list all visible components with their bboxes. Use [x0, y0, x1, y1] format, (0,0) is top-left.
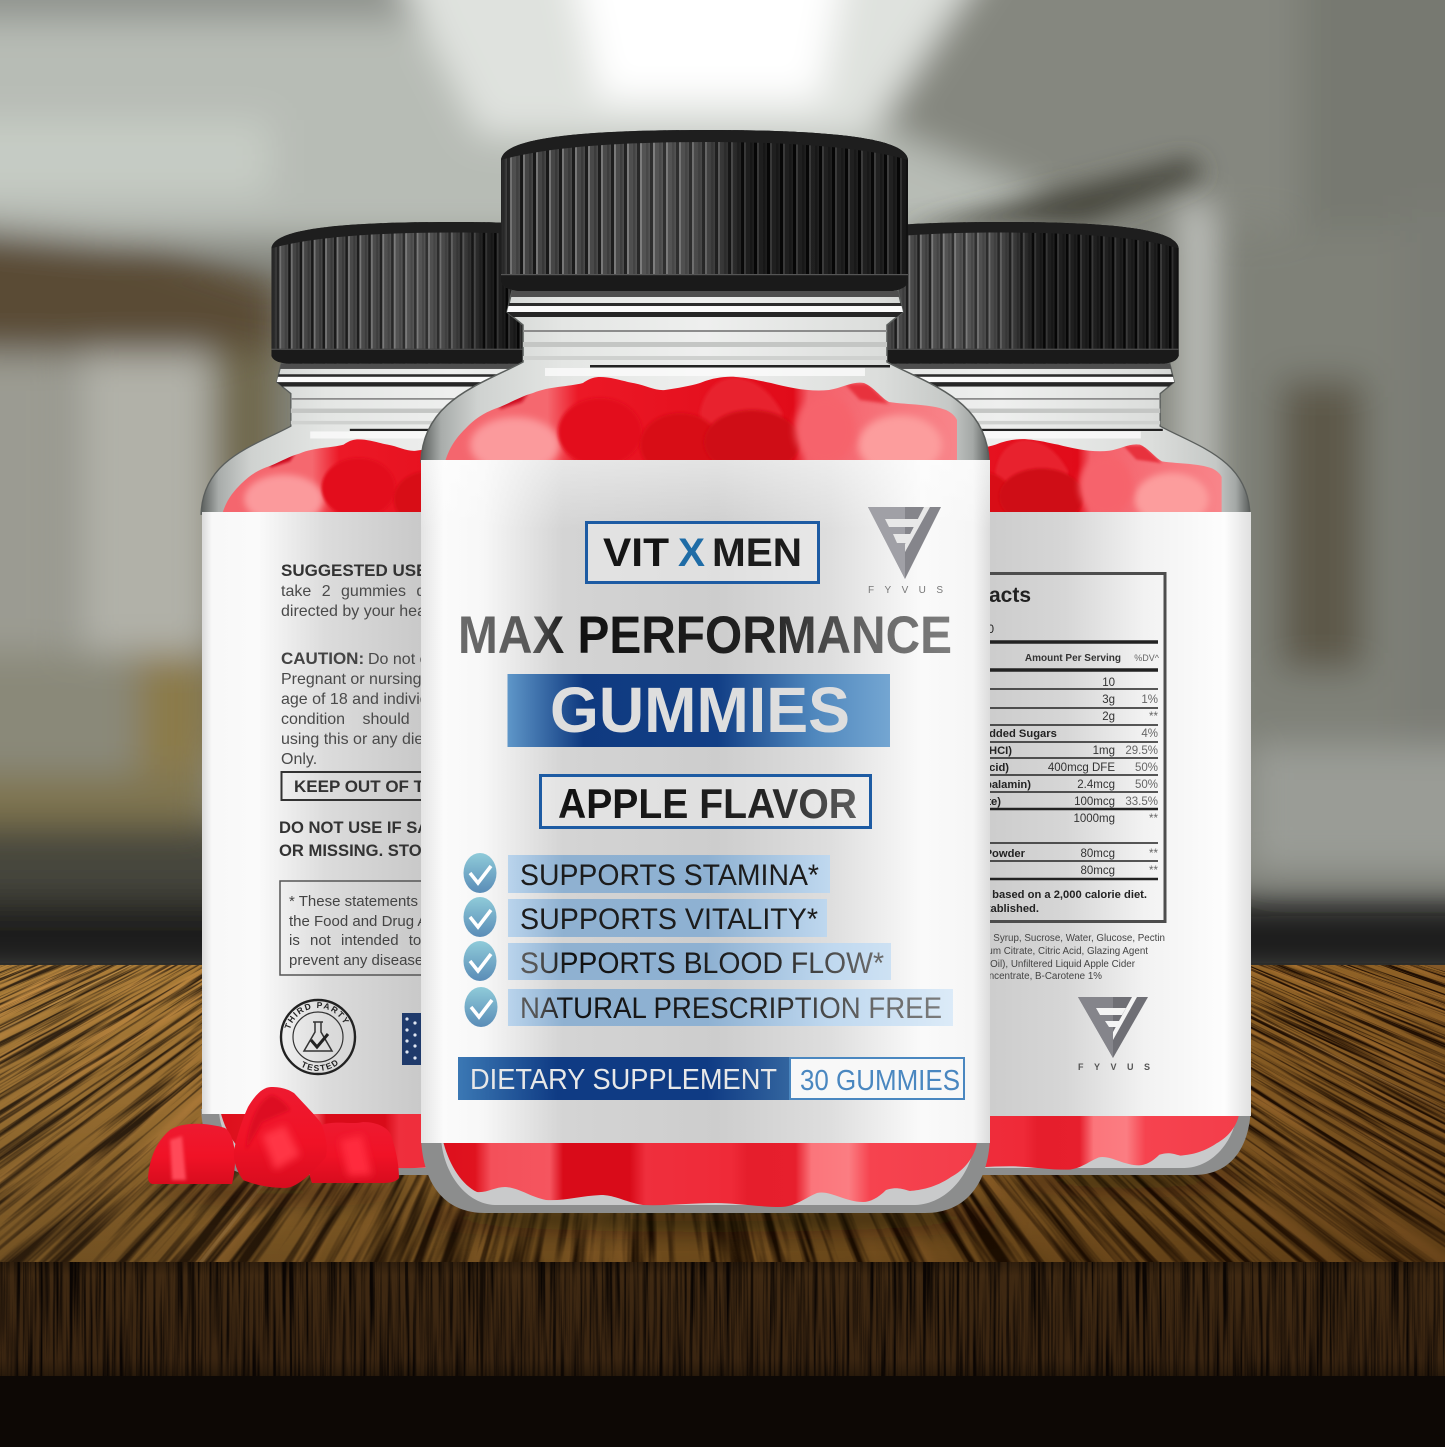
supplement facts panel: 400mcg DFE — [1048, 762, 1115, 774]
right bottle: supplement facts side — [750, 222, 1252, 1175]
supplement facts panel: Apple Powder — [950, 848, 1026, 860]
left bottle cap, neck and gummies — [201, 222, 703, 527]
supplement facts panel: Amount Per Serving — [1025, 653, 1121, 664]
supplement facts panel: ^ Percent Daily Values based on a 2,000 calorie diet. — [870, 889, 1147, 901]
left label suggested use: SUGGESTED USE: Adults — [281, 561, 490, 580]
supplement facts panel: 50% — [1135, 762, 1158, 774]
heading: max performance: MAX PERFORMANCE — [458, 606, 952, 665]
left label caution — [281, 649, 484, 768]
gummy left — [148, 1124, 235, 1184]
keep out box — [282, 772, 513, 800]
left label suggested use: directed by your healthcare — [281, 603, 474, 620]
fda disclaimer box: is not intended to diagnose — [289, 932, 492, 949]
benefit: blood flow: SUPPORTS BLOOD FLOW* — [520, 947, 884, 980]
left bottle label — [202, 512, 425, 1114]
right bottle label — [975, 512, 1251, 1116]
fyvus logo: FYVUS — [868, 585, 943, 596]
dietary supplement bar: DIETARY SUPPLEMENT — [470, 1064, 777, 1096]
brand box: X — [678, 531, 705, 575]
other ingredients: (Coconut Oil), Unfiltered Liquid Apple Cider — [948, 959, 1136, 970]
left label caution: condition should consult — [281, 711, 478, 728]
benefit: vitality — [464, 897, 827, 937]
brand box — [586, 522, 818, 582]
supplement facts panel: Supplement Facts — [850, 584, 1031, 607]
left label suggested use: take 2 gummies daily or as — [281, 583, 501, 600]
benefit: prescription free: NATURAL PRESCRIPTION FREE — [520, 992, 942, 1025]
supplement facts panel: (as HCI) — [970, 745, 1012, 757]
supplement facts panel: 1000mg — [1073, 813, 1115, 825]
supplement facts panel: ** — [1149, 813, 1159, 825]
left label caution: age of 18 and individuals — [281, 691, 458, 708]
benefit: vitality: SUPPORTS VITALITY* — [520, 903, 818, 936]
keep out box: KEEP OUT OF THE REACH — [294, 777, 513, 796]
right bottle base gummies — [750, 1109, 1251, 1175]
gummies banner: GUMMIES — [550, 674, 850, 746]
fda disclaimer box: the Food and Drug Admin — [289, 913, 460, 930]
left label caution: Do not exceed — [368, 651, 471, 668]
left bottle base gummies — [201, 1109, 702, 1175]
supplement facts panel: 1% — [1141, 694, 1158, 706]
do not use warning: DO NOT USE IF SAFETY SEAL — [279, 818, 520, 837]
left label caution: CAUTION: — [281, 649, 364, 668]
do not use warning: OR MISSING. STORE — [279, 841, 445, 860]
supplement facts panel: (as Cyanocobalamin) — [918, 779, 1031, 791]
table front face — [0, 1262, 1445, 1376]
supplement facts panel: 80mcg — [1080, 865, 1115, 877]
benefit: stamina — [464, 853, 830, 893]
supplement facts panel: 80mcg — [1080, 848, 1115, 860]
left bottle: directions side — [200, 222, 743, 1213]
fda disclaimer box: * These statements have — [289, 893, 455, 910]
supplement facts panel: ** — [1149, 848, 1159, 860]
center bottle label — [421, 460, 990, 1143]
benefit: blood flow — [464, 941, 891, 981]
center bottle base gummies — [421, 1138, 990, 1213]
supplement facts panel: 100mcg — [1074, 796, 1115, 808]
supplement facts panel: 10 — [1102, 677, 1115, 689]
supplement facts panel: 2.4mcg — [1077, 779, 1115, 791]
supplement facts panel: %DV^ — [1134, 653, 1160, 663]
flavor box: APPLE FLAVOR — [558, 780, 857, 827]
fda disclaimer box: prevent any disease. — [289, 952, 427, 969]
supplement facts panel: 1mg — [1093, 745, 1115, 757]
right bottle cap, neck and gummies — [750, 222, 1252, 527]
third party tested seal — [280, 998, 356, 1076]
left label caution: Only. — [281, 751, 317, 768]
table lower dark band — [0, 1376, 1445, 1447]
wooden table top with perspective planks — [0, 962, 1445, 1262]
supplement facts panel: 3g — [1102, 694, 1115, 706]
third party tested seal: THIRD PARTY — [284, 1002, 350, 1028]
dietary supplement bar — [458, 1057, 964, 1100]
left label suggested use — [281, 561, 501, 620]
blurred room background — [0, 0, 1445, 980]
contact shadow under bottles — [150, 1170, 1250, 1232]
supplement facts panel: ** — [1149, 711, 1159, 723]
left label caution: using this or any dietary — [281, 731, 450, 748]
supplement facts panel: (as Folic Acid) — [933, 762, 1009, 774]
gummy right — [309, 1122, 399, 1183]
flag patch — [402, 1013, 432, 1065]
fyvus logo — [868, 507, 943, 596]
other ingredients — [912, 933, 1165, 982]
supplement facts panel: 50% — [1135, 779, 1158, 791]
dietary supplement bar: 30 GUMMIES — [800, 1065, 960, 1097]
supplement facts panel: ** Daily Value not established. — [880, 903, 1039, 915]
loose gummies on the table — [148, 1087, 399, 1188]
other ingredients: Sodium Citrate, Citric Acid, Glazing Agent — [968, 946, 1148, 957]
fyvus logo right — [1078, 997, 1150, 1072]
supplement facts panel — [850, 574, 1165, 922]
supplement facts panel: Servings Per Container 30 — [859, 624, 994, 636]
fda disclaimer box — [280, 881, 492, 975]
brand box: VIT — [603, 531, 669, 575]
benefit: stamina: SUPPORTS STAMINA* — [520, 859, 819, 892]
supplement facts panel: Added Sugars — [981, 728, 1057, 740]
brand box: MEN — [712, 531, 802, 575]
gummy middle — [234, 1087, 327, 1188]
supplement facts panel: 33.5% — [1125, 796, 1158, 808]
supplement facts panel: ** — [1149, 865, 1159, 877]
center bottle cap, neck and gummies — [421, 130, 991, 477]
supplement facts panel: 29.5% — [1125, 745, 1158, 757]
other ingredients: Vinegar Concentrate, B-Carotene 1% — [940, 971, 1102, 982]
fyvus logo right: FYVUS — [1078, 1062, 1150, 1072]
supplement facts panel: 4% — [1141, 728, 1158, 740]
supplement facts panel: (as Citrate) — [943, 796, 1001, 808]
do not use warning — [279, 818, 520, 860]
third party tested seal: TESTED — [302, 1060, 338, 1071]
center bottle — [421, 130, 991, 1213]
other ingredients: Other Ingredients: Syrup, Sucrose, Water, Glucose, Pectin — [912, 933, 1165, 944]
left label caution: Pregnant or nursing mothers — [281, 671, 484, 688]
supplement facts panel: 2g — [1102, 711, 1115, 723]
